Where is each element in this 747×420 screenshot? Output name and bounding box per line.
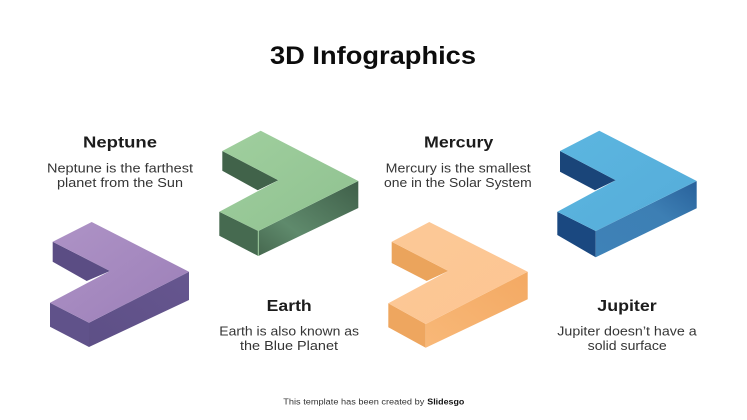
right face	[426, 272, 528, 348]
inner wall	[53, 242, 110, 281]
icon: orange 3D chevron	[388, 222, 528, 348]
right face	[596, 181, 697, 257]
front face	[557, 212, 596, 257]
footer credit	[283, 398, 464, 407]
panel: Mercury text	[384, 135, 532, 190]
heading: Jupiter: Jupiter	[597, 298, 657, 315]
panel: Neptune text	[47, 135, 193, 190]
top face	[557, 131, 697, 231]
footer credit: This template has been created by	[283, 398, 424, 407]
front face	[50, 303, 89, 347]
text: Earth description	[219, 323, 360, 353]
panel: Jupiter text	[557, 298, 698, 353]
text: Jupiter description	[557, 323, 698, 353]
text: Mercury description: Mercury is the smallest	[386, 161, 531, 176]
text: Mercury description	[384, 161, 532, 190]
heading: Mercury: Mercury	[424, 135, 493, 152]
text: Earth description: the Blue Planet	[240, 338, 338, 353]
right face	[89, 272, 189, 347]
text: Neptune description: planet from the Sun	[57, 175, 183, 190]
text: Neptune description: Neptune is the farthest	[47, 161, 193, 176]
text: Jupiter description: solid surface	[588, 338, 667, 353]
right face	[258, 181, 358, 256]
top face	[219, 131, 358, 231]
top face	[50, 222, 189, 323]
top face	[388, 222, 528, 324]
panel: Earth text	[219, 298, 360, 353]
inner wall	[222, 151, 278, 190]
heading: Earth: Earth	[267, 298, 312, 315]
front face	[219, 212, 258, 256]
front face	[388, 303, 426, 348]
front edge highlight	[257, 231, 259, 256]
title: 3D Infographics	[270, 42, 476, 70]
icon: green 3D chevron	[219, 131, 358, 256]
icon: blue 3D chevron	[557, 131, 697, 257]
text: Mercury description: one in the Solar System	[384, 175, 532, 190]
text: Earth description: Earth is also known as	[219, 323, 360, 338]
icon: purple 3D chevron	[50, 222, 189, 347]
inner wall	[392, 242, 448, 281]
heading: Neptune: Neptune	[83, 135, 157, 152]
inner wall	[560, 151, 616, 190]
footer credit: Slidesgo	[427, 398, 464, 407]
text: Neptune description	[47, 161, 193, 190]
text: Jupiter description: Jupiter doesn’t have a	[557, 323, 698, 338]
